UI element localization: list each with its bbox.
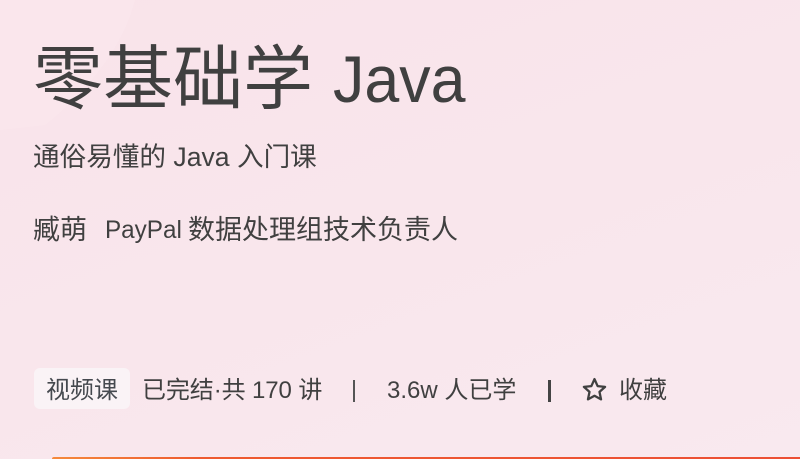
title Chinese text: 零基础学 xyxy=(33,40,313,118)
bottom accent bar xyxy=(52,457,800,459)
subtitle: 通俗易懂的 Java 入门课 xyxy=(33,142,317,172)
learner count: 3.6w 人已学 xyxy=(387,377,516,404)
title Latin text: Java xyxy=(333,42,465,116)
instructor xyxy=(33,215,458,245)
title xyxy=(33,40,466,118)
tag: video course xyxy=(34,368,130,409)
tag text: 视频课 xyxy=(46,377,118,404)
lecture count: 已完结·共 170 讲 xyxy=(142,377,322,404)
separator xyxy=(353,380,355,402)
favorite label: 收藏 xyxy=(619,377,667,404)
instructor name: 臧萌 xyxy=(33,215,87,245)
instructor company: PayPal xyxy=(105,216,182,244)
decorative corner shape xyxy=(0,0,140,130)
instructor role: 数据处理组技术负责人 xyxy=(188,215,458,245)
icon: star xyxy=(582,378,606,400)
separator xyxy=(548,380,551,402)
meta row xyxy=(34,368,667,409)
